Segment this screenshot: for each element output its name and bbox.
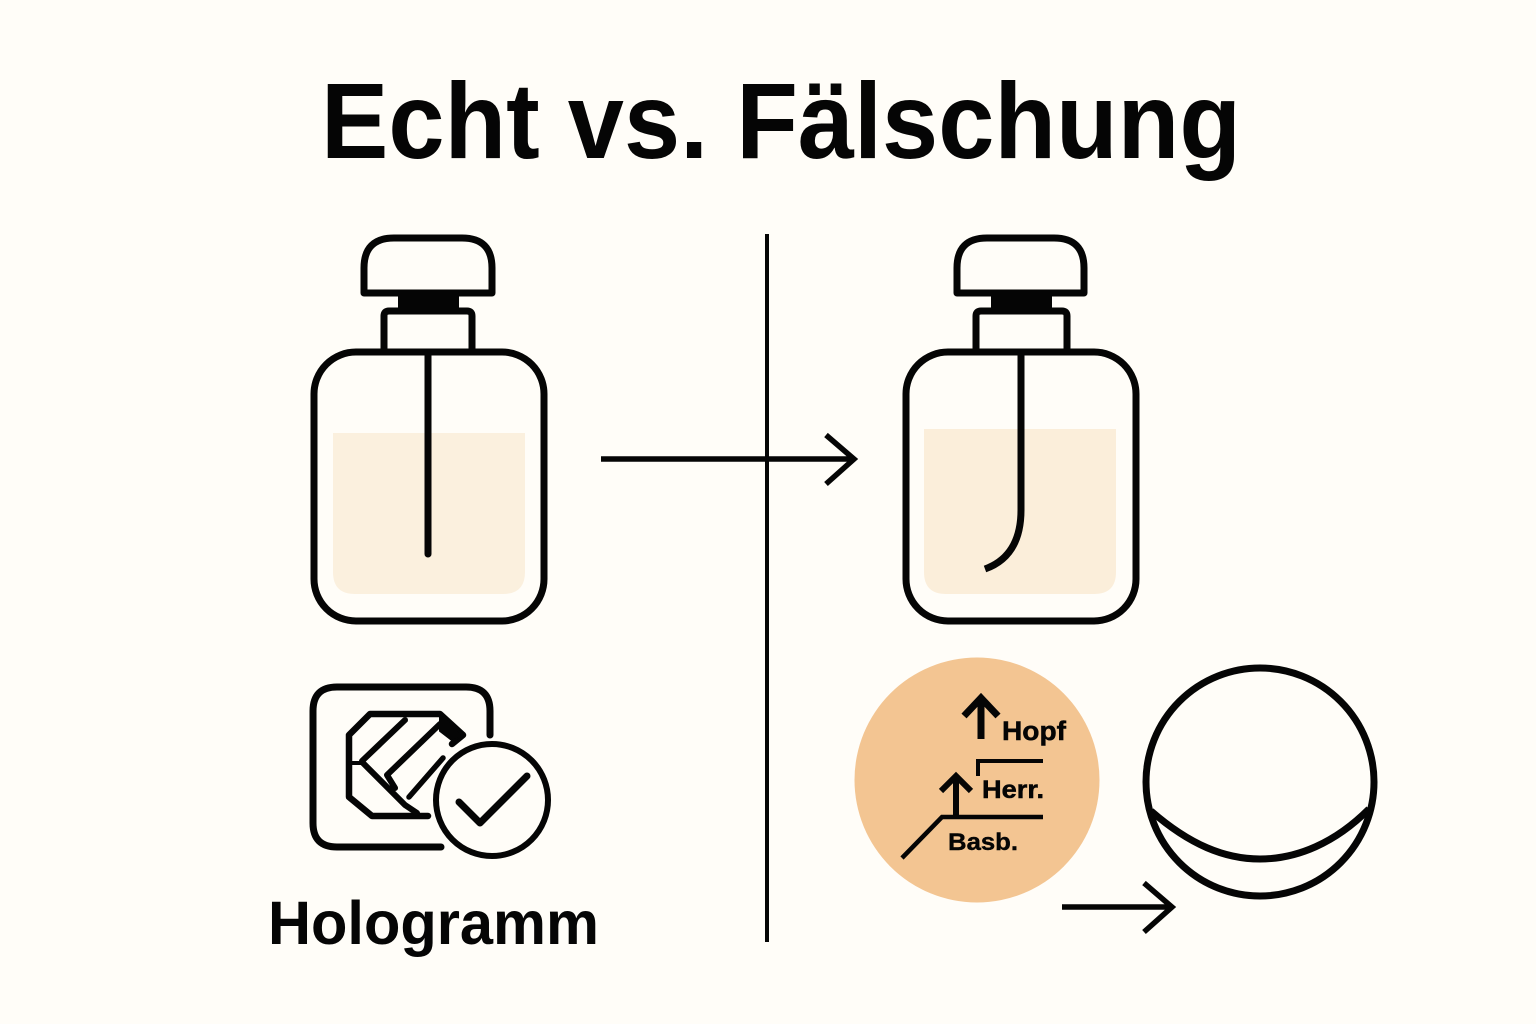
badge: orange fragrance notes circle <box>854 658 1100 902</box>
sphere crescent line <box>1151 809 1369 859</box>
genuine bottle collar <box>384 311 472 350</box>
title: Echt vs. Fälschung <box>321 60 1241 181</box>
fake bottle collar <box>976 311 1067 350</box>
fake bottle neck <box>991 295 1052 310</box>
badge background <box>854 658 1100 902</box>
icon: genuine perfume bottle <box>314 238 544 621</box>
Basb label: Basb. <box>948 829 1018 856</box>
genuine bottle body <box>314 352 544 621</box>
fake bottle liquid <box>924 429 1116 594</box>
icon: sphere with crescent <box>1146 668 1374 896</box>
genuine bottle neck <box>398 295 459 310</box>
icon: hologram with check <box>313 687 548 856</box>
hologram frame <box>313 687 490 847</box>
hologram octagon <box>349 714 463 816</box>
Hopf label: Hopf <box>1002 716 1067 746</box>
hologram dark corner <box>440 716 463 741</box>
hologram stripes <box>362 720 440 813</box>
fake bottle cap <box>957 238 1084 293</box>
arrow: badge to sphere <box>1062 883 1172 932</box>
icon: fake perfume bottle <box>906 238 1136 621</box>
genuine bottle straight tube <box>424 352 432 554</box>
genuine bottle liquid <box>333 433 525 594</box>
label: Hologramm: Hologramm <box>268 889 599 957</box>
Herr label: Herr. <box>982 776 1044 804</box>
fake bottle body <box>906 352 1136 621</box>
genuine bottle cap <box>364 238 492 293</box>
hologram left tick <box>349 761 362 765</box>
Herr arrow <box>941 776 971 815</box>
sphere outline <box>1146 668 1374 896</box>
hologram third stripe <box>409 758 443 797</box>
Basb line <box>902 817 1043 858</box>
check mark <box>459 776 527 823</box>
fake bottle bent tube <box>985 352 1021 569</box>
divider line <box>765 234 769 942</box>
arrow: genuine to fake <box>601 435 854 484</box>
check circle <box>436 744 548 856</box>
Herr bracket <box>978 761 1043 776</box>
Hopf arrow <box>964 698 998 739</box>
